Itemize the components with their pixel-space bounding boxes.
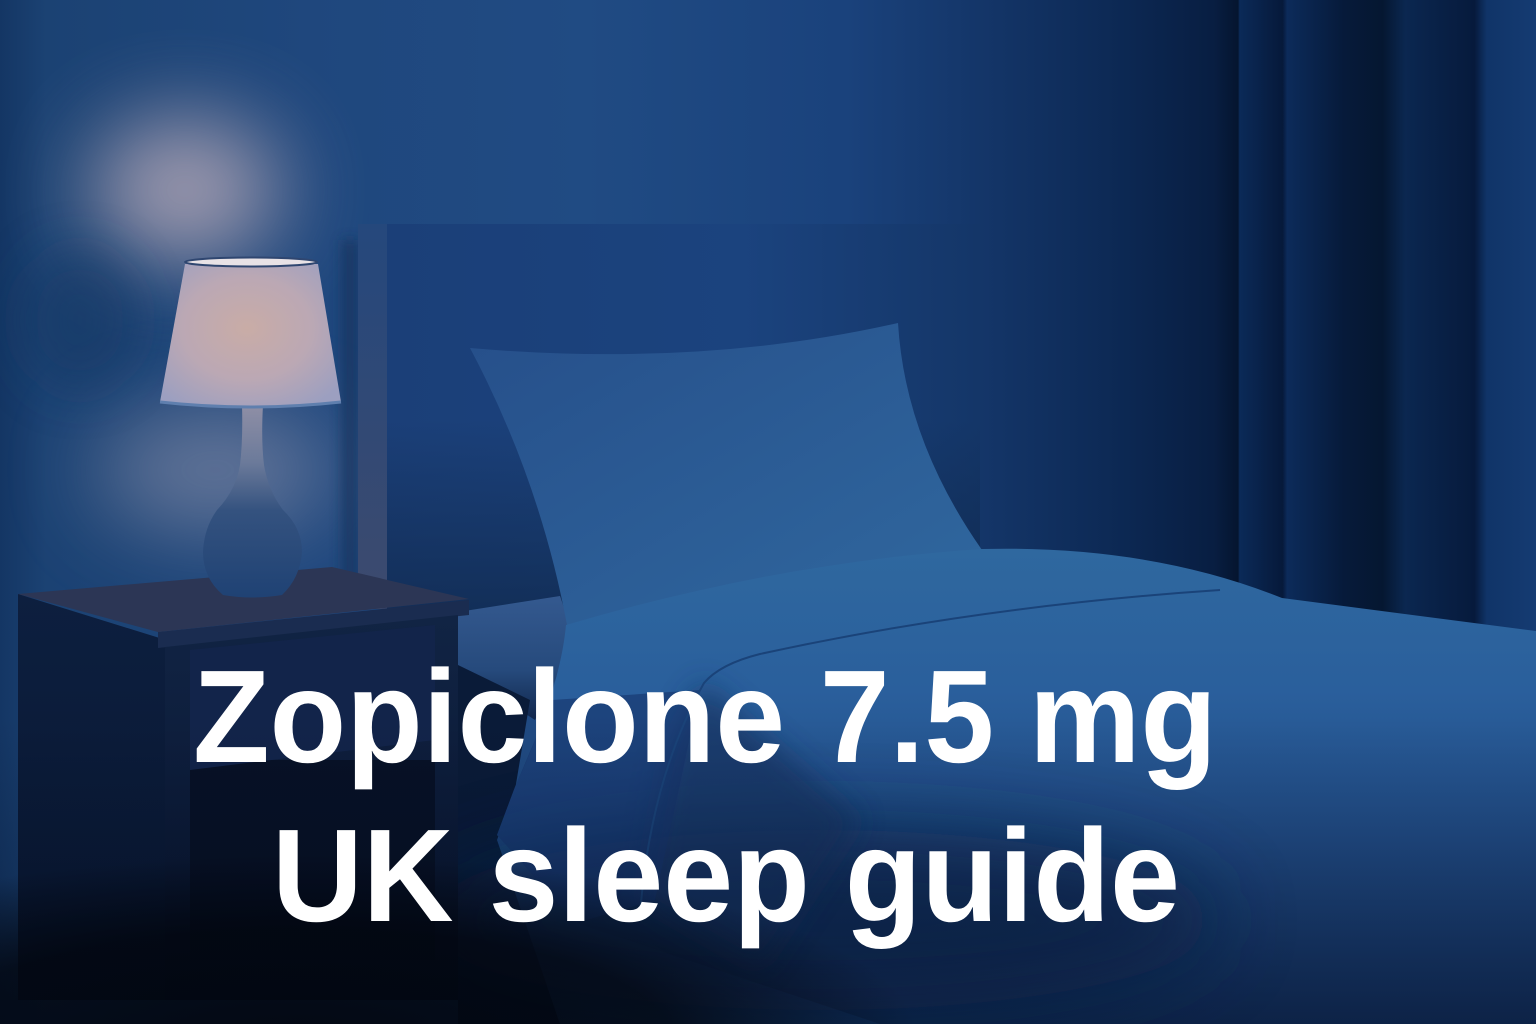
- duvet side shading: [497, 690, 700, 923]
- pillow: [470, 323, 982, 625]
- shade opening: [185, 258, 317, 266]
- title: [193, 643, 1217, 949]
- lamp base: [203, 405, 302, 598]
- duvet fold line: [640, 590, 1220, 915]
- duvet lower shading: [420, 830, 1220, 1010]
- lamp shade: [160, 264, 341, 407]
- headboard: [342, 224, 980, 624]
- title: Zopiclone 7.5 mg: [193, 643, 1217, 790]
- bed side shadow: [458, 665, 560, 1024]
- duvet overhang shading: [640, 683, 860, 970]
- table lamp: [160, 258, 341, 598]
- lamp glow on wall: [20, 118, 335, 530]
- duvet: [420, 549, 1536, 1024]
- shade rim: [160, 402, 341, 407]
- title: UK sleep guide: [272, 802, 1180, 949]
- nightstand: [18, 567, 469, 1000]
- floor shadow at left: [0, 840, 1000, 1024]
- mattress sheet: [458, 596, 575, 720]
